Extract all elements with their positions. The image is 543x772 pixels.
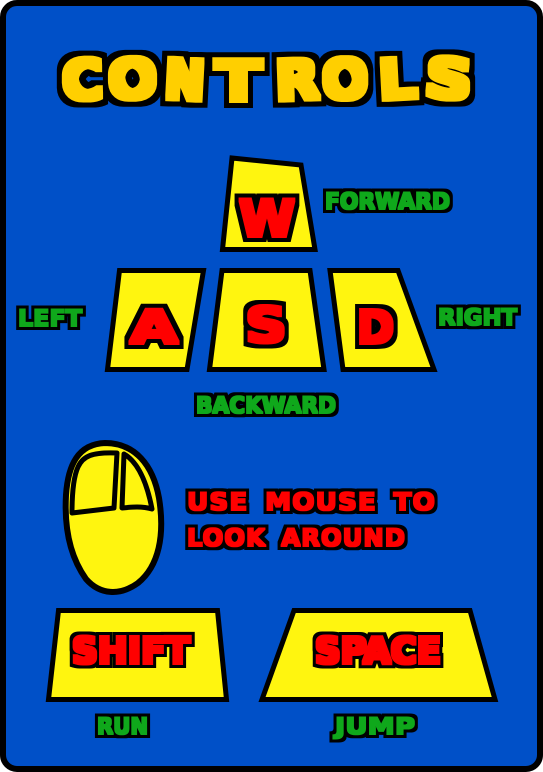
label: left: LEFT — [18, 307, 82, 332]
label: backward: BACKWARD — [196, 394, 336, 419]
key: space: SPACE — [315, 631, 441, 672]
title: N — [163, 48, 206, 113]
label: forward: FORWARD — [325, 190, 450, 215]
key: W: W — [239, 190, 295, 248]
label: run: RUN — [97, 715, 148, 740]
title: O — [320, 47, 370, 113]
label: right: RIGHT — [438, 306, 517, 331]
title: L — [376, 47, 419, 112]
key: S — [210, 270, 324, 370]
key: space — [262, 610, 495, 700]
title: C — [61, 48, 104, 113]
key: shift — [48, 610, 226, 700]
title: O — [106, 46, 159, 113]
text: mouse instruction: LOOK AROUND — [187, 524, 406, 552]
title — [61, 45, 476, 113]
key: shift: SHIFT — [72, 631, 190, 672]
key: D — [330, 270, 434, 370]
key: W — [222, 158, 315, 250]
key: D: D — [357, 301, 394, 354]
key: A — [108, 270, 204, 370]
title: R — [274, 48, 320, 113]
key: S: S — [245, 298, 287, 354]
text: mouse instruction — [187, 488, 436, 552]
title: S — [422, 45, 476, 113]
icon: mouse — [66, 443, 161, 592]
label: jump: JUMP — [333, 715, 415, 740]
text: mouse instruction: USE MOUSE TO — [187, 488, 436, 516]
title: T — [215, 50, 262, 113]
key: A: A — [130, 301, 178, 354]
